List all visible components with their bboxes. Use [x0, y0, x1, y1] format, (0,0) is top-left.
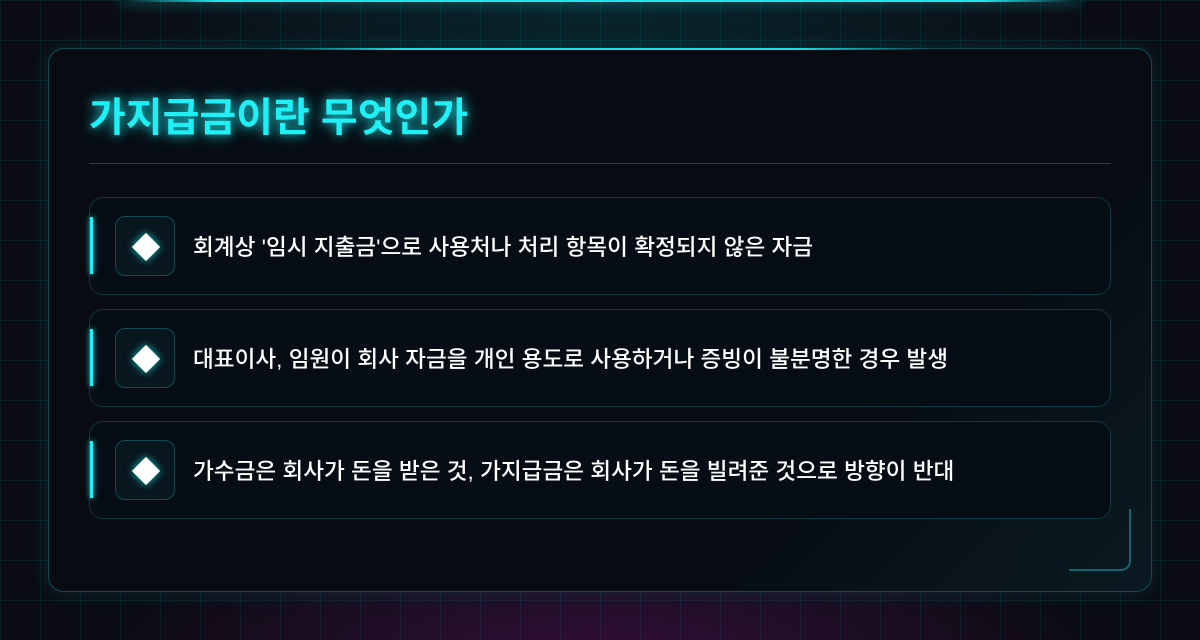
text: item 2: 대표이사, 임원이 회사 자금을 개인 용도로 사용하거나 증빙이 불분명한 경우 발생 [193, 347, 948, 372]
corner bracket [1069, 509, 1131, 571]
item 3 [89, 421, 1111, 519]
text: item 3: 가수금은 회사가 돈을 받은 것, 가지급금은 회사가 돈을 빌려준 것으로 방향이 반대 [193, 459, 954, 484]
icon: diamond [115, 328, 175, 388]
title: 가지급금이란 무엇인가 [89, 96, 468, 140]
icon: diamond [115, 440, 175, 500]
item 1 [89, 197, 1111, 295]
icon: diamond [115, 216, 175, 276]
item 2 [89, 309, 1111, 407]
text: item 1: 회계상 '임시 지출금'으로 사용처나 처리 항목이 확정되지 않은 자금 [193, 235, 813, 260]
panel: main card [48, 48, 1152, 592]
